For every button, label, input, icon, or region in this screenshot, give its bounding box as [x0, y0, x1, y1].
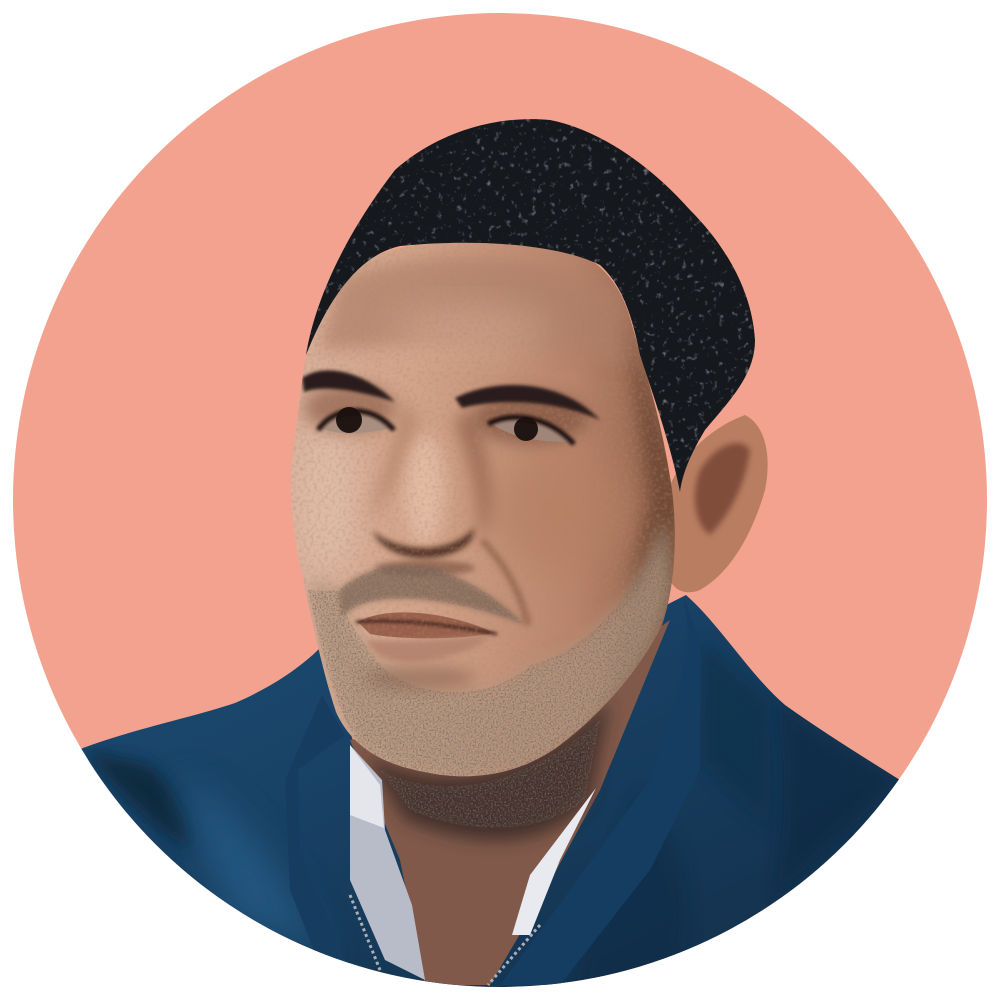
cheek right	[495, 467, 554, 552]
collar right	[500, 658, 700, 985]
moustache	[338, 565, 525, 625]
collar left	[289, 696, 352, 964]
figure	[60, 119, 910, 1000]
shirt left highlight	[350, 745, 384, 828]
skin pores	[291, 243, 674, 772]
right eye	[488, 417, 574, 444]
left brow	[302, 370, 395, 402]
nostril shadow	[372, 528, 474, 558]
left eye	[318, 407, 394, 433]
shirt left	[350, 745, 425, 980]
mouth	[356, 612, 497, 661]
stubble area	[308, 520, 672, 776]
jacket	[60, 590, 910, 1000]
right shadow	[608, 337, 675, 700]
shirt right	[512, 788, 596, 935]
zip	[350, 895, 540, 985]
neck shadow	[365, 700, 610, 840]
nose left shadow	[367, 400, 418, 520]
forehead tone	[318, 254, 628, 354]
hair	[306, 119, 755, 492]
nose shadow side	[455, 410, 490, 540]
light cheek	[305, 436, 362, 570]
neck	[350, 620, 670, 985]
left eye socket	[304, 384, 396, 432]
forehead light	[390, 308, 550, 352]
right eye socket	[472, 392, 588, 444]
ear	[668, 415, 768, 592]
right brow	[455, 385, 600, 420]
jacket shadow folds	[85, 750, 190, 850]
nasolabial fold	[482, 540, 528, 625]
nose highlight	[405, 435, 445, 545]
face	[291, 242, 675, 776]
neck stubble	[380, 720, 600, 828]
chin shadow	[365, 666, 475, 690]
under nose shadow	[375, 560, 475, 576]
hair highlights	[306, 119, 755, 492]
